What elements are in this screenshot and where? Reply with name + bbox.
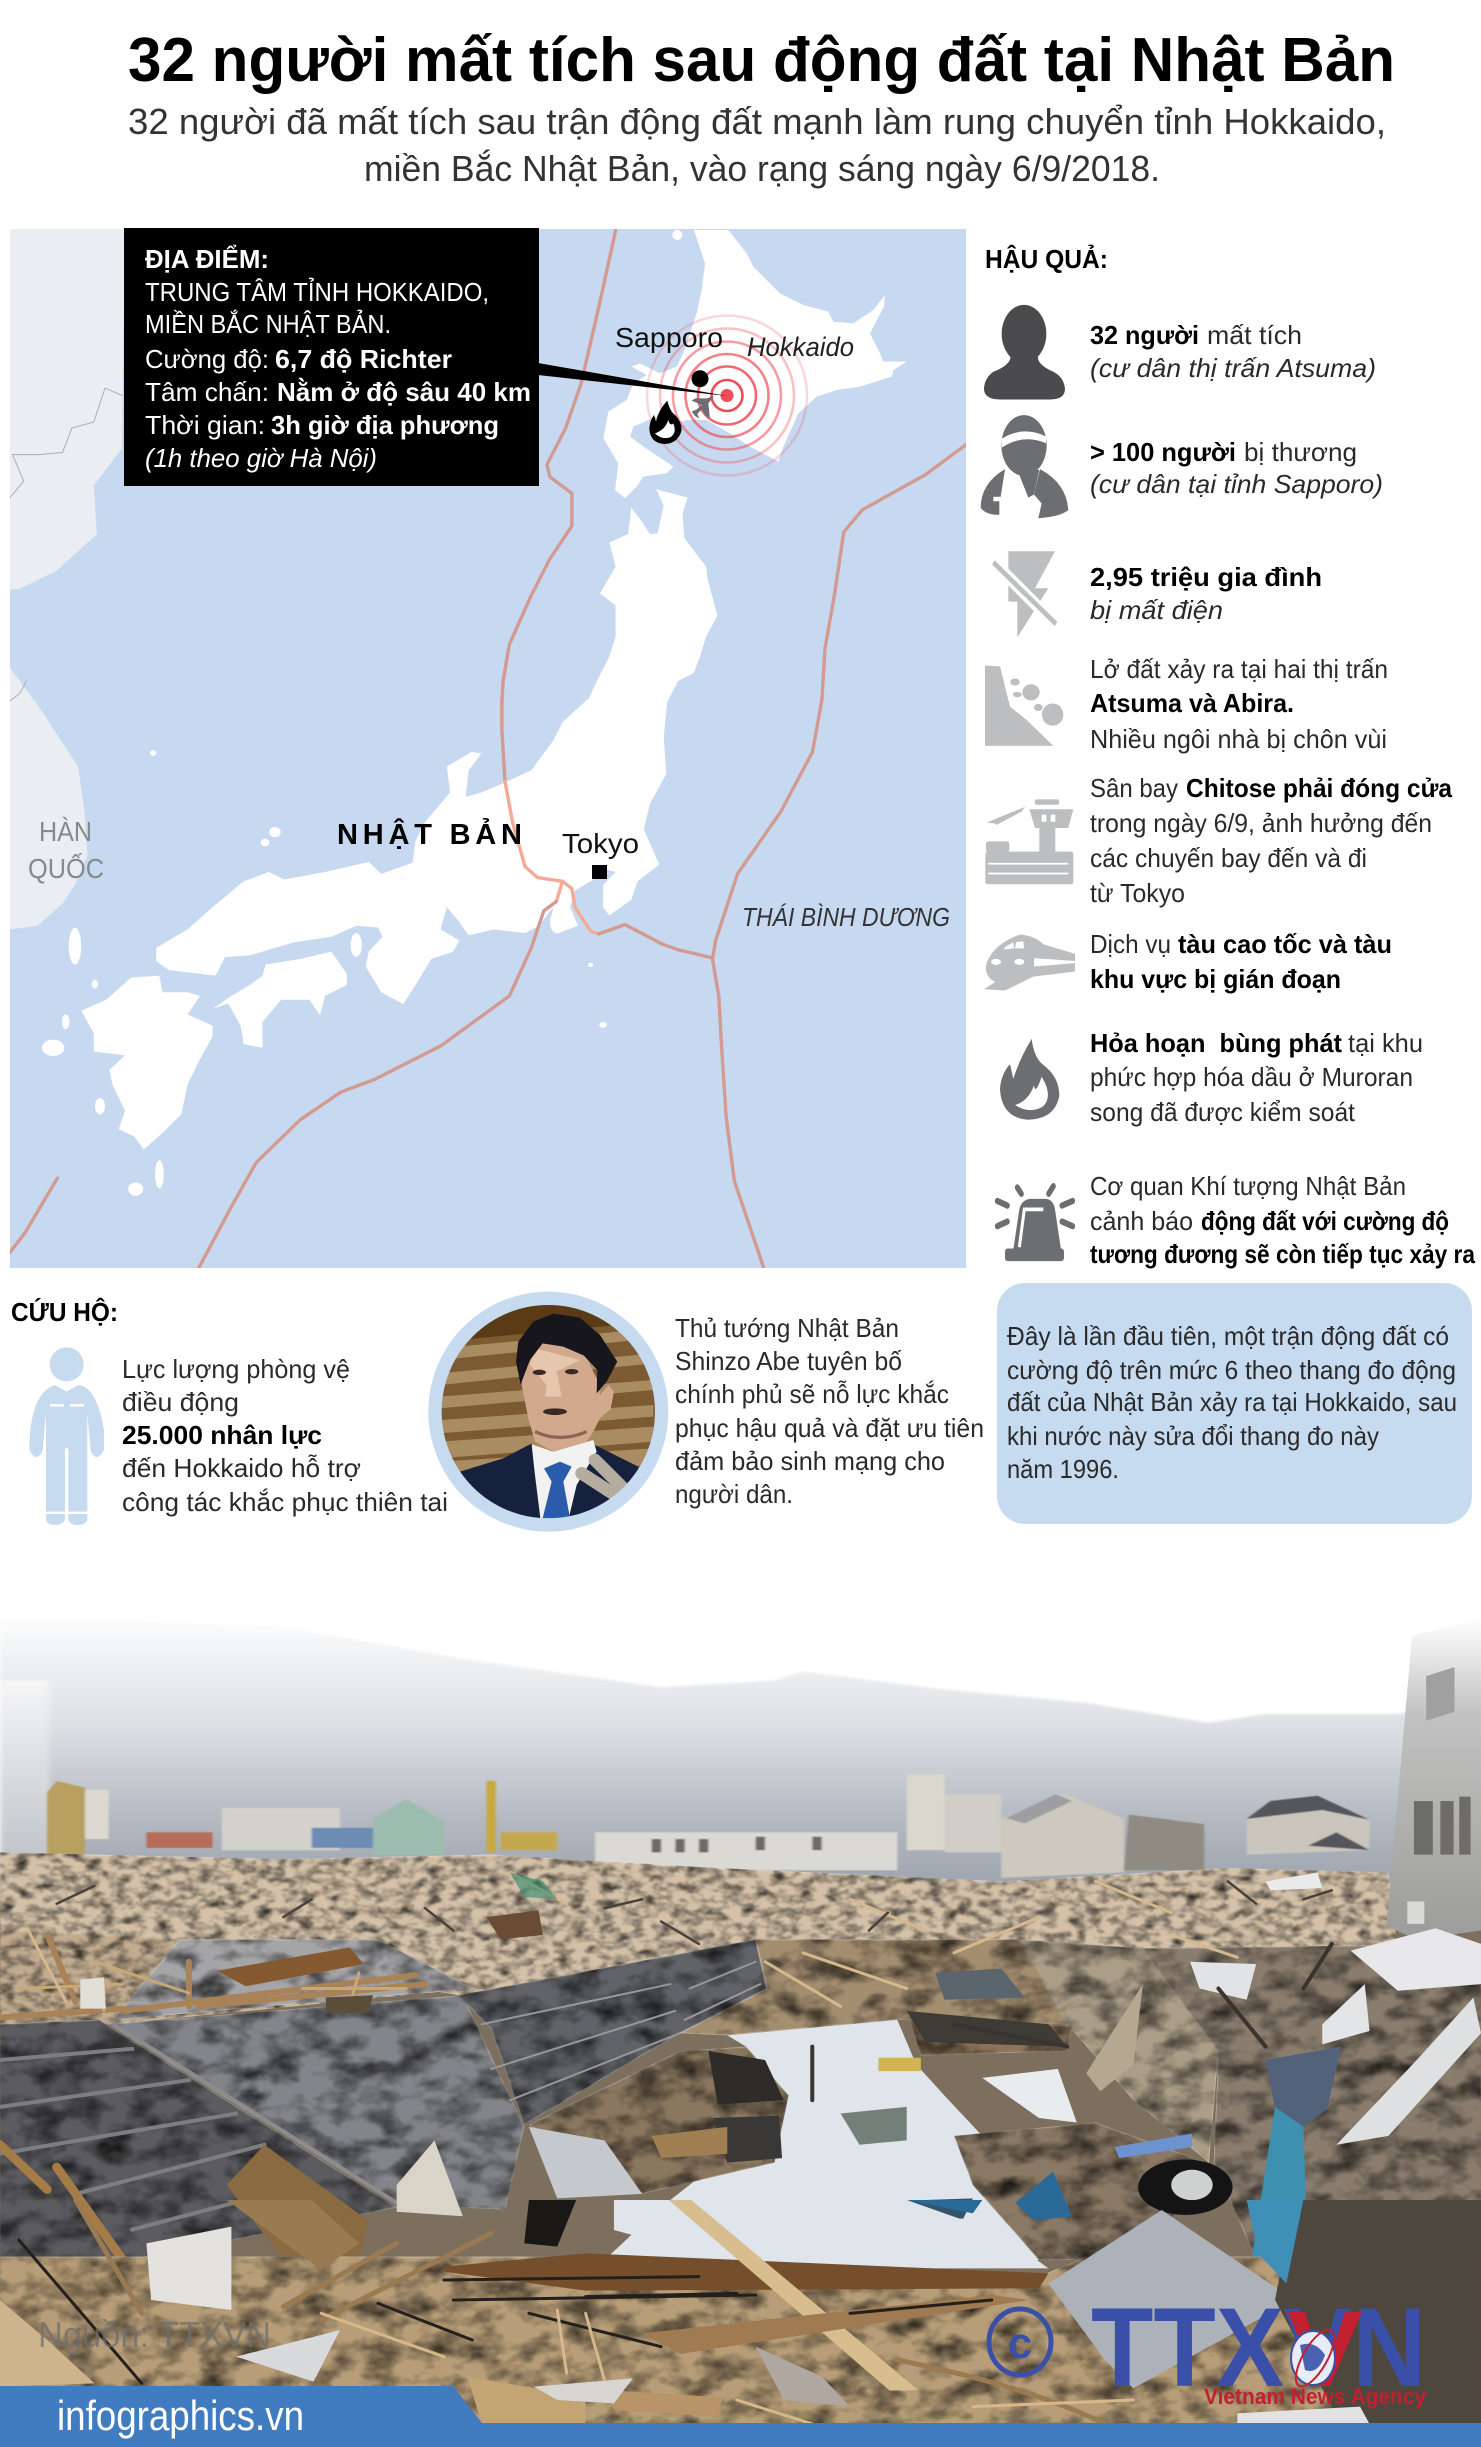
logo: TTXVN: TTXVN <box>1091 2285 1426 2410</box>
map: fire icon <box>649 401 682 444</box>
text: Prime Minister statement: người dân. <box>675 1479 793 1509</box>
icon: train <box>984 935 1075 990</box>
text: missing: (cư dân thị trấn Atsuma) <box>1090 353 1376 383</box>
text: rescue forces: 25.000 nhân lực <box>122 1420 322 1450</box>
map marker: Tokyo <box>592 865 607 879</box>
subtitle: 32 người đã mất tích sau trận động đất mạnh làm rung chuyển tỉnh Hokkaido, <box>128 101 1386 142</box>
photo: scattered foreground objects <box>28 1872 1481 2260</box>
callout: location details: Nằm ở độ sâu 40 km <box>277 377 531 407</box>
text: Prime Minister statement: Thủ tướng Nhật Bản <box>675 1313 899 1343</box>
callout: location details: Tâm chấn: <box>145 377 269 407</box>
icon: person <box>984 305 1065 399</box>
text: Prime Minister statement <box>675 1313 984 1509</box>
photo: misty mountains <box>0 1614 1481 1899</box>
text: Prime Minister statement: chính phủ sẽ nỗ lực khắc <box>675 1379 949 1409</box>
text: airport: Chitose phải đóng cửa <box>1186 773 1453 803</box>
text: missing: mất tích <box>1207 320 1302 350</box>
icon: fire <box>1000 1039 1059 1120</box>
panel: note box: khi nước này sửa đổi thang đo này <box>1007 1421 1379 1451</box>
photo: debris base layer <box>0 1900 1481 2430</box>
callout: location details: 3h giờ địa phương <box>271 410 499 440</box>
map label: Sapporo: Sapporo <box>615 322 723 353</box>
photo: foreground wreckage <box>0 2257 1481 2427</box>
logo: TTXVN: Vietnam News Agency <box>1204 2384 1427 2409</box>
panel: note box: đất của Nhật Bản xảy ra tại Hokkaido, sau <box>1007 1387 1457 1417</box>
panel: rescue <box>11 1292 984 1532</box>
map label: Pacific Ocean: THÁI BÌNH DƯƠNG <box>742 902 950 932</box>
callout: location details: Thời gian: <box>145 410 265 440</box>
footer bar <box>0 2386 1481 2447</box>
text: rescue forces <box>122 1354 448 1517</box>
map label: Korea: HÀN <box>39 816 92 847</box>
icon: airport <box>985 799 1073 884</box>
icon: alarm <box>997 1186 1073 1261</box>
text: power outage: 2,95 triệu gia đình <box>1090 562 1322 592</box>
map: Kyushu <box>81 976 212 1150</box>
photo: right building <box>1387 1618 1481 1939</box>
text: power outage <box>1090 562 1322 625</box>
text: rescue forces: Lực lượng phòng vệ <box>122 1354 350 1384</box>
text: train <box>1090 929 1392 994</box>
icon: soldier figure <box>29 1347 104 1525</box>
map: airport plane icon <box>692 396 714 419</box>
text: warning: động đất với cường độ <box>1201 1206 1449 1236</box>
text: missing: 32 người <box>1090 320 1199 350</box>
photo: debris around water, right wall <box>529 1939 1481 2260</box>
text: warning: cảnh báo <box>1090 1206 1193 1236</box>
heading: consequences: HẬU QUẢ: <box>985 244 1108 274</box>
callout: location details: TRUNG TÂM TỈNH HOKKAIDO, <box>145 277 489 307</box>
text: fire: phức hợp hóa dầu ở Muroran <box>1090 1062 1413 1092</box>
text: fire: song đã được kiểm soát <box>1090 1097 1356 1127</box>
photo: roof and wall details <box>0 1935 760 2260</box>
text: airport: từ Tokyo <box>1090 878 1185 908</box>
map: Shikoku <box>212 952 347 1048</box>
map label: Korea: QUỐC <box>28 852 104 884</box>
text: injured: bị thương <box>1244 437 1357 467</box>
map label: Tokyo: Tokyo <box>562 828 639 859</box>
panel: note box: cường độ trên mức 6 theo thang đo động <box>1007 1355 1456 1385</box>
text: Prime Minister statement: phục hậu quả và đặt ưu tiên <box>675 1413 984 1443</box>
map label: Korea <box>28 816 104 884</box>
text: landslide <box>1090 654 1388 754</box>
text: airport <box>1090 773 1453 908</box>
subtitle: miền Bắc Nhật Bản, vào rạng sáng ngày 6/9/2018. <box>364 148 1160 189</box>
text: airport: các chuyến bay đến và đi <box>1090 843 1367 873</box>
map: land borders <box>9 388 122 701</box>
photo: planks and panels <box>0 2200 1481 2424</box>
source credit: Nguồn: TTXVN <box>38 2314 271 2355</box>
callout: location details: ĐỊA ĐIỂM: <box>145 244 269 274</box>
text: fire: Hỏa hoạn bùng phát <box>1090 1028 1342 1058</box>
map: tectonic plate boundaries <box>9 230 968 1268</box>
text: injured: > 100 người <box>1090 437 1236 467</box>
icon: landslide <box>985 666 1063 746</box>
map: central and western Honshu <box>42 699 668 1196</box>
map label: Hokkaido: Hokkaido <box>747 332 854 362</box>
photo: debris field, far <box>0 1852 1398 2024</box>
callout: location details: Cường độ: <box>145 344 269 374</box>
subtitle <box>128 101 1386 189</box>
panel: note box: Đây là lần đầu tiên, một trận động đất có <box>1007 1321 1449 1351</box>
icon: injured person <box>981 415 1068 518</box>
photo: flooded street <box>604 2020 1077 2260</box>
text: fire <box>1090 1028 1423 1127</box>
text: Prime Minister statement: đảm bảo sinh mạng cho <box>675 1446 945 1476</box>
map: Hokkaido <box>603 230 907 498</box>
text: train: khu vực bị gián đoạn <box>1090 964 1341 994</box>
text: airport: Sân bay <box>1090 773 1178 803</box>
text: injured: (cư dân tại tỉnh Sapporo) <box>1090 469 1383 499</box>
panel: consequences <box>981 244 1475 1269</box>
text: missing <box>1090 320 1376 383</box>
photo: earthquake devastation <box>0 1614 1481 2430</box>
photo: distant town <box>47 1774 1370 1878</box>
text: injured <box>1090 437 1383 499</box>
text: fire: tại khu <box>1348 1028 1423 1058</box>
footer website: infographics.vn <box>57 2392 304 2439</box>
map: epicentre rings <box>647 316 807 476</box>
map: mainland Asia <box>9 228 125 929</box>
photo: collapsed roof and steps <box>0 1939 767 2260</box>
text: train: Dịch vụ <box>1090 929 1171 959</box>
text: warning: Cơ quan Khí tượng Nhật Bản <box>1090 1171 1406 1201</box>
panel: note box <box>997 1283 1472 1524</box>
title: 32 người mất tích sau động đất tại Nhật Bản <box>128 26 1395 95</box>
map: Sapporo dot <box>692 370 708 387</box>
text: landslide: Atsuma và Abira. <box>1090 688 1294 718</box>
map label: Japan: NHẬT BẢN <box>337 817 522 851</box>
text: airport: trong ngày 6/9, ảnh hưởng đến <box>1090 808 1432 838</box>
map: northern Honshu <box>588 489 718 701</box>
text: rescue forces: đến Hokkaido hỗ trợ <box>122 1453 361 1483</box>
callout: location details <box>124 228 539 486</box>
text: landslide: Nhiều ngôi nhà bị chôn vùi <box>1090 724 1387 754</box>
text: train: tàu cao tốc và tàu <box>1178 929 1392 959</box>
panel: map of Japan <box>9 228 968 1268</box>
text: warning <box>1090 1171 1475 1269</box>
text: rescue forces: công tác khắc phục thiên tai <box>122 1487 448 1517</box>
callout pointer <box>538 363 727 396</box>
heading: rescue: CỨU HỘ: <box>11 1297 118 1327</box>
text: rescue forces: điều động <box>122 1387 239 1417</box>
panel: note box: năm 1996. <box>1007 1454 1119 1484</box>
callout: location details: MIỀN BẮC NHẬT BẢN. <box>145 309 391 339</box>
photo: Prime Minister portrait <box>428 1292 668 1532</box>
text: power outage: bị mất điện <box>1090 595 1223 625</box>
text: landslide: Lở đất xảy ra tại hai thị trấn <box>1090 654 1388 684</box>
logo: TTXVN: c <box>1008 2319 1032 2368</box>
callout: location details: (1h theo giờ Hà Nội) <box>145 443 377 473</box>
icon: power outage <box>991 551 1057 637</box>
text: Prime Minister statement: Shinzo Abe tuyên bố <box>675 1346 902 1376</box>
callout: location details: 6,7 độ Richter <box>275 344 452 374</box>
map: small islands <box>42 750 607 1196</box>
